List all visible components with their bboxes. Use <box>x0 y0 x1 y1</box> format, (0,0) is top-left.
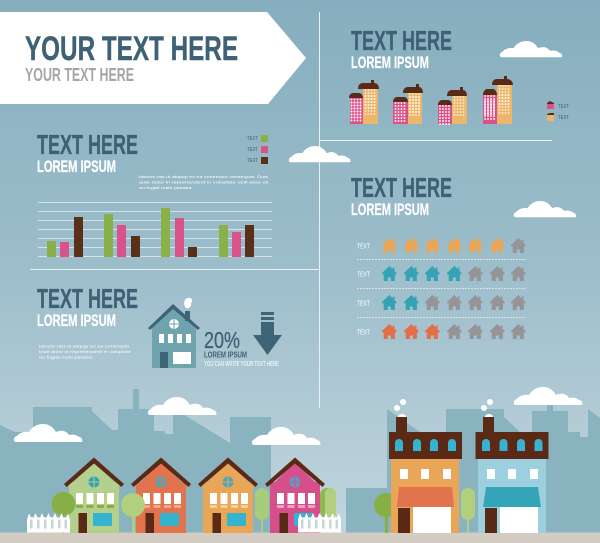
stat caption: YOU CAN WRITE YOUR TEXT HERE <box>204 361 279 368</box>
fence: left <box>27 513 70 532</box>
shop: blue <box>476 399 548 533</box>
building group 2 <box>393 84 423 124</box>
house: red <box>131 458 191 533</box>
tree: in front of red house <box>121 493 145 533</box>
building group 1 <box>349 80 379 124</box>
row 4: TEXT <box>357 330 371 336</box>
paragraph: eu fugiat nulla pariatur. <box>39 354 94 360</box>
paragraph: eu fugiat nulla pariatur. <box>139 185 193 190</box>
title banner: YOUR TEXT HERE <box>25 30 238 68</box>
legend: TEXT <box>247 158 258 164</box>
panel: bar chart section <box>37 129 272 257</box>
heading: TEXT HERE <box>351 172 452 203</box>
panel: house pictogram section <box>351 172 526 339</box>
tree: beside shop <box>374 493 398 533</box>
subheading: LOREM IPSUM <box>37 312 116 330</box>
legend: TEXT <box>558 104 569 110</box>
panel: buildings section <box>349 25 569 125</box>
ground <box>0 532 600 543</box>
house: pink <box>265 458 325 533</box>
dividers <box>30 12 552 408</box>
legend: TEXT <box>247 136 258 142</box>
row 1 <box>357 238 526 253</box>
subheading: LOREM IPSUM <box>351 54 429 72</box>
legend: TEXT <box>558 115 569 121</box>
row 1: TEXT <box>357 244 371 250</box>
stat: 20%: 20% <box>204 327 240 353</box>
house: green <box>64 458 124 533</box>
paragraph: laboris nisi ut aliquip ex ea commodo <box>39 344 130 348</box>
paragraph: laboris nisi ut aliquip ex ea commodo consequat. Duis <box>139 174 268 179</box>
skyline <box>0 389 600 533</box>
row 4 <box>357 324 526 339</box>
row 2: TEXT <box>357 272 371 278</box>
building group 3 <box>438 87 467 125</box>
icon: house <box>148 298 200 368</box>
subheading: LOREM IPSUM <box>351 201 429 219</box>
heading: TEXT HERE <box>351 25 452 56</box>
house: orange <box>198 458 258 533</box>
tree: between shops <box>461 488 475 533</box>
row 3 <box>357 295 526 310</box>
row 3: TEXT <box>357 300 371 308</box>
heading: TEXT HERE <box>37 283 138 314</box>
subheading: LOREM IPSUM <box>37 158 116 176</box>
title banner <box>0 12 306 104</box>
legend <box>547 101 569 121</box>
fence: right <box>298 513 341 532</box>
legend <box>247 135 268 164</box>
paragraph <box>39 344 132 360</box>
panel: house value section <box>37 283 282 368</box>
tree: left, in front of green house <box>52 492 76 533</box>
clouds <box>14 41 582 445</box>
shop: orange <box>389 399 462 533</box>
paragraph <box>139 174 268 190</box>
row 2 <box>357 266 526 281</box>
heading: TEXT HERE <box>37 129 138 160</box>
building group 4 <box>483 76 513 124</box>
dashed separators <box>357 260 526 318</box>
legend: TEXT <box>247 147 258 153</box>
title banner: YOUR TEXT HERE <box>25 65 134 85</box>
icon: down arrow <box>253 312 282 355</box>
paragraph: aute dolor in reprehenderit in voluptate velit esse cil <box>139 180 268 184</box>
bar chart <box>38 202 272 257</box>
paragraph: irure dolor in reprehenderit in voluptate <box>39 349 132 354</box>
trees behind houses <box>255 488 336 533</box>
stat label: LOREM IPSUM <box>204 350 247 360</box>
